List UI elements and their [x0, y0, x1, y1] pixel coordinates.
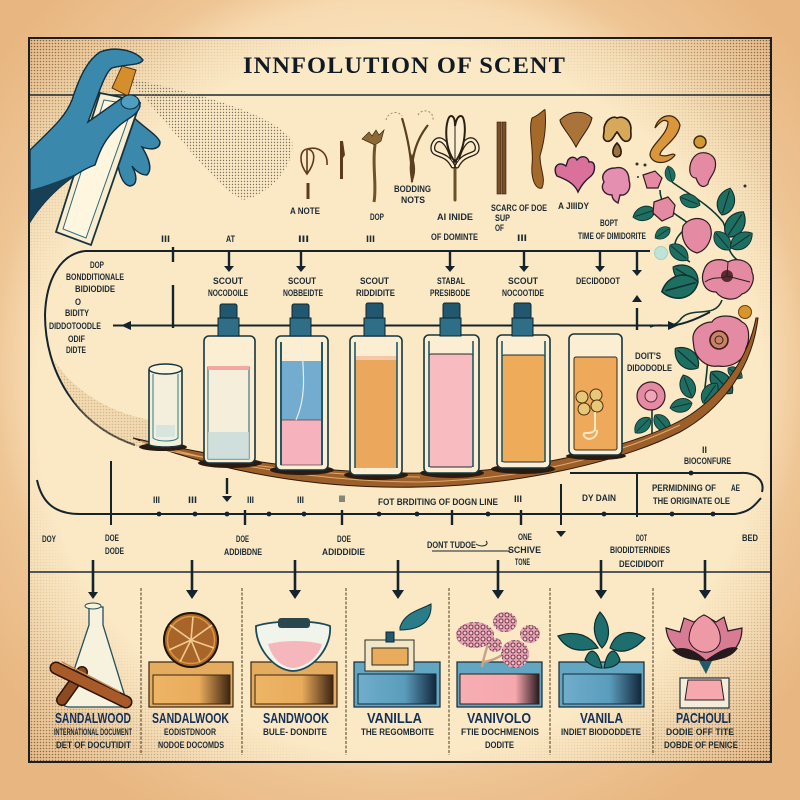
- labels: upper tier: DOP: [370, 212, 384, 222]
- upper timeline bowl curve: [45, 246, 710, 450]
- labels: upper tier: III: [366, 234, 375, 244]
- labels: above columns: DECIDIDOIT: [619, 559, 664, 569]
- bottle 2: blue and pink: [276, 304, 328, 470]
- labels: above columns: ADIDDIDIE: [322, 547, 365, 557]
- icon: bark stick: [340, 141, 345, 179]
- labels: upper tier: AT: [226, 234, 235, 244]
- icon: gold seed: [738, 306, 752, 318]
- labels: upper tier: SCARC OF DOE: [491, 203, 547, 213]
- labels: upper tier: BODDING: [394, 184, 431, 194]
- icon: small rose on stem: [637, 382, 665, 410]
- labels: under top line: [208, 276, 620, 298]
- caption 1: SANDALWOOD: [55, 710, 131, 727]
- caption 2: EODISTDNOOR: [164, 727, 216, 737]
- labels: above columns: ONE: [518, 532, 532, 542]
- icon: iris outline: [433, 116, 477, 200]
- icon: pink blob blossom: [690, 153, 716, 186]
- icon: rose bud: [653, 197, 675, 221]
- leaves: [631, 165, 757, 437]
- labels: left column of bowl: BONDDITIONALE: [66, 272, 124, 282]
- labels: above columns: DOY: [42, 534, 57, 544]
- labels: above columns: DOT: [636, 533, 647, 543]
- labels: upper tier: BOPT: [600, 218, 618, 228]
- labels: under top line: DECIDODOT: [576, 276, 620, 286]
- labels: upper tier: SUP: [495, 213, 510, 223]
- lower timeline: [37, 461, 763, 537]
- bottle 5: amber: [497, 303, 550, 468]
- icon: wavy bark: [531, 110, 546, 188]
- column captions: [54, 710, 738, 750]
- labels: above columns: DOE: [236, 534, 249, 544]
- labels: above columns: BIODIDTERNDIES: [610, 545, 670, 555]
- labels: right of jar: DOIT'S: [635, 351, 661, 361]
- lower fingers: [118, 112, 160, 186]
- wooden shelf: [133, 318, 758, 487]
- labels: above columns: [42, 532, 758, 569]
- caption 2: SANDALWOOK: [152, 710, 229, 727]
- labels: above columns: ADDIBDNE: [224, 547, 262, 557]
- labels: upper tier: NOTS: [401, 195, 425, 205]
- labels: under top line: SCOUT: [360, 276, 389, 286]
- column 5: blossom branch and box: [456, 612, 542, 707]
- column 7: lotus and small box: [666, 615, 742, 708]
- labels: under top line: NOCOOTIDE: [502, 288, 544, 298]
- caption 7: DOBDE OF PENICE: [664, 740, 738, 750]
- icon: forked twig: [386, 111, 433, 182]
- nozzle: [112, 66, 136, 96]
- caption 2: [152, 710, 229, 750]
- caption 5: DODITE: [485, 740, 514, 750]
- bottle 6: open jar with flower: [569, 334, 622, 455]
- caption 5: VANIVOLO: [467, 710, 531, 727]
- labels: under top line: RIDDIDITE: [356, 288, 395, 298]
- labels: right of jar: [627, 351, 672, 373]
- labels: under top line: STABAL: [437, 276, 465, 286]
- icon: dried sprig: [362, 130, 384, 202]
- botanical ingredient row: [301, 110, 680, 203]
- icon: cinnamon strips: [497, 122, 506, 194]
- icon: rose: [682, 218, 711, 253]
- labels: lower timeline: AE: [731, 483, 740, 493]
- labels: under top line: SCOUT: [213, 276, 243, 286]
- icon: pink lily: [555, 157, 595, 192]
- caption 2: NODOE DOCOMDS: [158, 740, 224, 750]
- labels: under top line: NOBBEIDTE: [283, 288, 323, 298]
- icon: brown fan: [560, 112, 592, 147]
- labels: lower timeline: III: [247, 495, 254, 505]
- labels: upper tier: TIME OF DIMIDORITE: [578, 231, 646, 241]
- labels: lower timeline: III: [297, 495, 304, 505]
- column 1: flask and cinnamon: [56, 603, 127, 707]
- labels: above columns: DOE: [105, 533, 119, 543]
- caption 7: [664, 710, 738, 750]
- labels: lower timeline: II: [702, 445, 707, 455]
- labels: upper tier: III: [298, 234, 309, 244]
- labels: under top line: SCOUT: [288, 276, 316, 286]
- title: INNFOLUTION OF SCENT: [243, 53, 566, 78]
- icon: small rose: [643, 171, 662, 188]
- caption 6: VANILA: [580, 710, 623, 727]
- labels: lower timeline: III: [188, 495, 197, 505]
- labels: above columns: DODE: [105, 546, 124, 556]
- labels: under top line: SCOUT: [508, 276, 538, 286]
- labels: left column of bowl: [49, 260, 124, 355]
- labels: above columns: DOE: [337, 534, 351, 544]
- icon: whisk sprig: [301, 148, 327, 199]
- icon: pink blossom: [602, 168, 630, 203]
- labels: above columns: BED: [742, 533, 758, 543]
- floral vine cluster: [631, 136, 757, 437]
- column arrows: [88, 560, 711, 599]
- caption 1: DET OF DOCUTIDIT: [56, 740, 131, 750]
- caption 7: PACHOULI: [676, 710, 731, 727]
- caption 3: BULE- DONDITE: [263, 727, 327, 737]
- column 4: leaf bottle and box: [354, 604, 440, 707]
- labels: upper tier: A NOTE: [290, 206, 320, 216]
- caption 5: FTIE DOCHMENOIS: [461, 727, 539, 737]
- labels: upper tier: III: [161, 234, 170, 244]
- small petals: [636, 162, 746, 188]
- labels: left column of bowl: ODIF: [68, 334, 85, 344]
- icon: gold bud: [694, 136, 706, 148]
- caption 7: DODIE OFF TITE: [666, 727, 734, 737]
- labels: upper tier: AI INIDE: [437, 212, 473, 222]
- labels: left column of bowl: BIDITY: [65, 308, 90, 318]
- labels: upper tier: OF DOMINTE: [431, 232, 478, 242]
- labels: lower timeline: PERMIDNING OF: [652, 483, 716, 493]
- labels: lower timeline: THE ORIGINATE OLE: [653, 496, 730, 506]
- labels: left column of bowl: DIDTE: [66, 345, 86, 355]
- column dividers: [141, 588, 653, 755]
- column 6: leaf plant and box: [558, 612, 645, 707]
- spray mist: [133, 79, 292, 200]
- labels: lower timeline: FOT BRDITING OF DOGN LINE: [378, 497, 498, 507]
- labels: left column of bowl: BIDIODIDE: [75, 284, 115, 294]
- bottle 4: pink: [424, 303, 479, 473]
- icon: ochre flower: [603, 117, 631, 157]
- labels: lower timeline: III: [153, 495, 160, 505]
- caption 3: [263, 710, 329, 737]
- icon: open rose: [702, 260, 753, 299]
- caption 3: SANDWOOK: [263, 710, 329, 727]
- labels: left column of bowl: DOP: [90, 260, 104, 270]
- caption 6: [561, 710, 641, 737]
- bottle: [56, 93, 140, 245]
- labels: lower timeline: DY DAIN: [582, 493, 616, 503]
- labels: lower timeline: III: [339, 494, 345, 504]
- caption 1: INTERNATIONAL DOCUMENT: [54, 727, 132, 737]
- caption 1: [54, 710, 132, 750]
- labels: above columns: SCHIVE: [508, 545, 541, 555]
- labels: upper tier: [161, 184, 646, 244]
- labels: lower timeline: [153, 445, 740, 507]
- labels: right of jar: DIDODODLE: [627, 363, 672, 373]
- caption 5: [461, 710, 539, 750]
- labels: under top line: NOCODOILE: [208, 288, 248, 298]
- labels: upper tier: A JIIIDY: [558, 201, 590, 211]
- bottle 1: pale: [204, 304, 255, 463]
- labels: above columns: DONT TUDOE: [427, 540, 476, 550]
- icon: large pink flower: [693, 316, 749, 366]
- labels: upper tier: OF: [495, 223, 504, 233]
- bottle 3: amber: [350, 303, 402, 475]
- column 2: dried orange and box: [149, 613, 233, 707]
- caption 4: [361, 710, 434, 737]
- labels: under top line: PRESIBODE: [430, 288, 470, 298]
- column 3: bowl bottle and box: [251, 618, 337, 707]
- caption 6: INDIET BIODODDETE: [561, 727, 641, 737]
- icon: orange swirl: [650, 116, 680, 162]
- caption 4: THE REGOMBOITE: [361, 727, 434, 737]
- labels: upper tier: III: [517, 233, 527, 243]
- labels: lower timeline: III: [514, 494, 522, 504]
- labels: lower timeline: BIOCONFURE: [684, 456, 731, 466]
- labels: above columns: TONE: [515, 557, 530, 567]
- caption 4: VANILLA: [367, 710, 422, 727]
- small open glass: [149, 364, 182, 447]
- labels: left column of bowl: DIDDOTOODLE: [49, 321, 101, 331]
- palm and thumb: [30, 49, 143, 222]
- labels: left column of bowl: O: [75, 297, 81, 307]
- vine stems: [650, 182, 740, 436]
- icon: hand holding spray bottle: [30, 49, 160, 245]
